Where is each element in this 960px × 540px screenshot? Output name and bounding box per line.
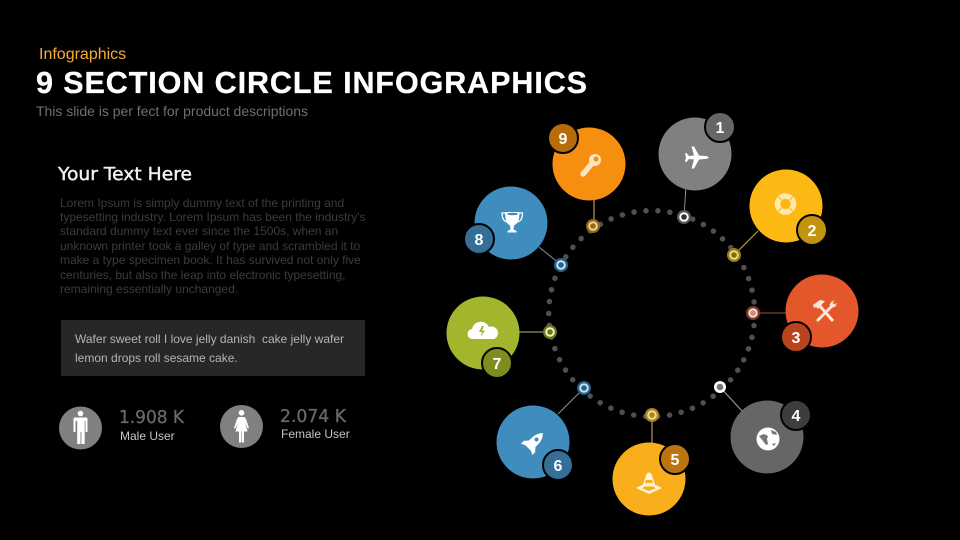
section 4: 4 — [792, 408, 801, 425]
callout panel: Wafer sweet roll I love jelly danish cake jelly wafer — [75, 332, 344, 346]
value: female: 2.074 K — [280, 406, 347, 427]
section 5 — [612, 408, 690, 516]
icon: rocket — [521, 427, 549, 455]
section 2: 2 — [808, 223, 817, 240]
section 9 — [548, 123, 626, 233]
icon: airplane — [685, 146, 709, 168]
icon: lifebuoy — [778, 196, 794, 212]
section 8: 8 — [475, 232, 484, 249]
icon: female figure — [220, 405, 263, 448]
icon: trophy — [502, 212, 522, 232]
value: male: 1.908 K — [119, 407, 185, 428]
icon: cloud with bolt — [467, 322, 498, 339]
section 6: 6 — [554, 458, 563, 475]
section 2 — [727, 170, 827, 262]
section 9: 9 — [559, 131, 568, 148]
icon: key — [583, 154, 601, 174]
section 7: 7 — [493, 356, 502, 373]
body paragraph: remaining essentially unchanged. — [60, 282, 238, 296]
stat: male user — [59, 406, 185, 450]
icon: male figure — [59, 406, 102, 450]
title: 9 SECTION CIRCLE INFOGRAPHICS — [36, 66, 587, 100]
subtitle: This slide is per fect for product descriptions — [36, 103, 308, 119]
body paragraph: centuries, but also the leap into electronic typesetting, — [60, 268, 346, 282]
callout panel: lemon drops roll sesame cake. — [75, 351, 238, 365]
icon: globe — [756, 428, 780, 450]
body paragraph — [60, 196, 366, 296]
caption: male: Male User — [120, 429, 175, 443]
heading: your text here: Your Text Here — [57, 164, 192, 185]
dotted ring — [549, 211, 755, 417]
section 3: 3 — [792, 330, 801, 347]
section 3 — [746, 274, 858, 352]
section 7 — [446, 296, 557, 378]
section 5: 5 — [671, 452, 680, 469]
body paragraph: Lorem Ipsum is simply dummy text of the printing and — [60, 196, 344, 210]
icon: traffic cone — [636, 472, 662, 494]
body paragraph: standard dummy text ever since the 1500s, when an — [60, 224, 338, 238]
callout panel — [61, 320, 365, 376]
section 8 — [464, 186, 568, 272]
caption: female: Female User — [281, 427, 350, 441]
section 1 — [658, 112, 735, 224]
body paragraph: unknown printer took a galley of type and scrambled it to — [60, 239, 360, 253]
section 4 — [714, 381, 811, 474]
section 6 — [496, 381, 591, 480]
icon: hammer and wrench — [813, 300, 837, 321]
body paragraph: typesetting industry. Lorem Ipsum has been the industry's — [60, 210, 366, 224]
section 1: 1 — [716, 120, 725, 137]
body paragraph: make a type specimen book. It has survived not only five — [60, 253, 361, 267]
eyebrow label: Infographics — [39, 46, 126, 63]
stat: female user — [220, 405, 350, 448]
